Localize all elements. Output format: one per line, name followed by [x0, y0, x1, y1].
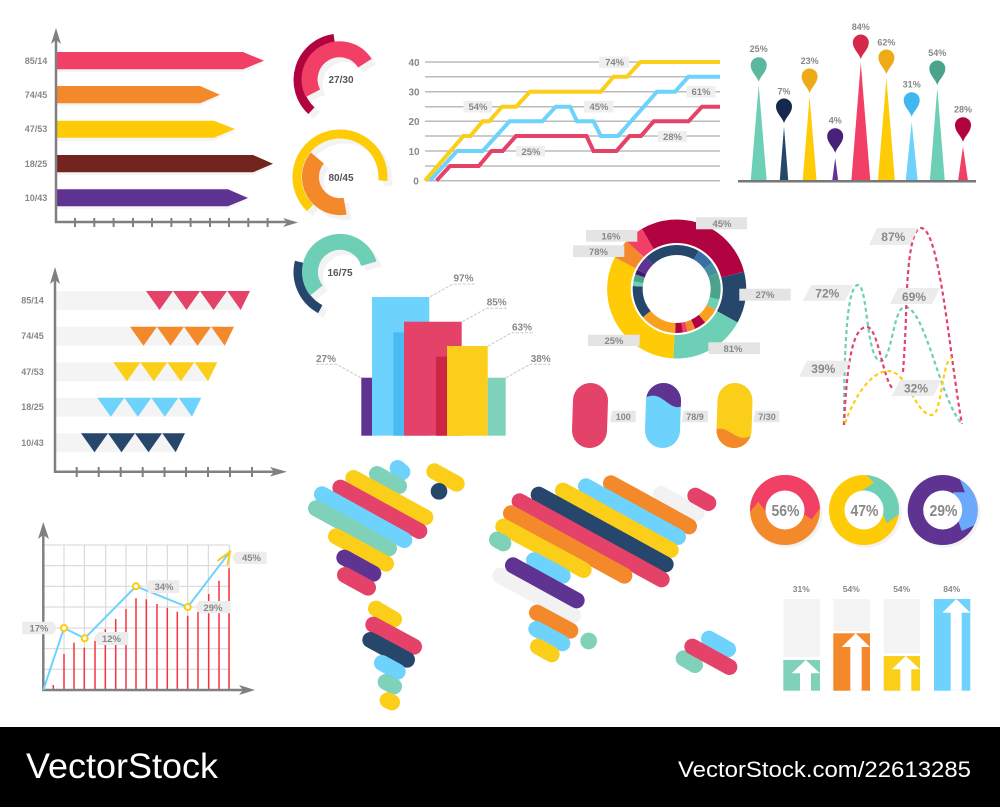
pin 84% [851, 22, 870, 181]
panel: radial gauge 16/75: 16/75 [327, 268, 353, 279]
panel: arrow column chart [783, 584, 970, 691]
chart tags: 17% [29, 624, 49, 634]
chart tags: 29% [203, 603, 223, 614]
pill tags: 78/9 [686, 412, 704, 422]
footer logo: VectorStock [26, 747, 219, 786]
panel: donut 29% [908, 475, 983, 548]
donut tags: 16% [601, 232, 621, 242]
donut tags: 78% [589, 247, 609, 258]
curve tags: 87% [881, 230, 906, 244]
axis numbers: 10 [408, 147, 420, 158]
axis numbers: 20 [408, 117, 420, 128]
pill 7/30 [716, 383, 752, 448]
column 31%: 31% [793, 584, 810, 594]
value tags: 54% [468, 102, 488, 113]
column red overlap [436, 357, 447, 436]
pill tags [610, 411, 779, 422]
curve tags: 32% [904, 382, 928, 396]
column percent labels: 63% [512, 322, 532, 334]
donut tags: 81% [723, 344, 743, 355]
pin 62% [877, 38, 895, 181]
curve tags: 39% [811, 362, 836, 376]
column 54% yellow [884, 584, 920, 691]
row labels: 74/45 [21, 331, 44, 341]
column percent labels: 27% [316, 354, 336, 365]
outer ring [619, 231, 734, 347]
footer bar [0, 727, 1000, 807]
triangles row 74/45 [130, 327, 234, 346]
panel: donut 47% [829, 473, 903, 548]
red bars [53, 568, 229, 690]
row labels: 10/43 [21, 438, 44, 448]
chart tags: 12% [102, 634, 122, 645]
axes [51, 28, 298, 227]
value tags: 25% [521, 147, 541, 158]
triangles row 10/43 [81, 433, 185, 452]
axes [38, 522, 255, 695]
arrow bar: 85/14 [56, 52, 264, 69]
line: yellow [425, 62, 720, 181]
panel: stepped line chart [408, 56, 720, 188]
pill 100 [572, 383, 608, 448]
triangles row 47/53 [113, 362, 217, 381]
column 31% [783, 584, 820, 691]
panel: radial gauge 80/45 [297, 134, 388, 213]
row labels [25, 56, 47, 203]
arrow tip [217, 552, 230, 565]
value tags [464, 56, 716, 158]
curve tags [799, 228, 942, 396]
column percent labels [316, 274, 551, 365]
column purple [361, 378, 372, 436]
column percent labels: 85% [487, 298, 507, 308]
line: blue [430, 77, 720, 181]
curve tags: 72% [815, 286, 840, 300]
panel: radial gauge 27/30 [298, 38, 370, 116]
panel: dashed curve chart [799, 228, 962, 425]
arrow bar: 74/45 [56, 86, 220, 103]
row labels [21, 296, 44, 448]
axis numbers [408, 58, 420, 188]
column red [404, 322, 462, 436]
North America [316, 468, 425, 588]
panel: radial gauge 27/30: 27/30 [328, 75, 354, 86]
column 54% orange: 54% [843, 584, 860, 594]
column yellow [447, 346, 488, 436]
curve tags: 69% [902, 290, 926, 304]
panel: donut 56% [748, 473, 822, 548]
value tags: 74% [605, 58, 625, 68]
triangles row 85/14 [146, 291, 250, 310]
panel: radial gauge 80/45: 80/45 [328, 173, 354, 184]
pin 31%: 31% [903, 80, 921, 90]
column blue [372, 297, 429, 436]
panel: pin spike chart [738, 22, 976, 182]
pill tags: 100 [616, 412, 631, 422]
panel: triangle row chart [21, 267, 287, 477]
axis numbers: 30 [408, 88, 420, 98]
triangles row 18/25 [97, 398, 201, 417]
pin 25%: 25% [750, 44, 768, 54]
markers [61, 583, 191, 641]
row backgrounds [56, 291, 241, 452]
arrow bar: 47/53 [56, 121, 235, 138]
panel: donut 47%: 47% [850, 503, 878, 520]
row labels: 18/25 [21, 402, 44, 412]
chart tags [22, 552, 267, 645]
value tags: 28% [663, 132, 683, 143]
donut tags: 27% [755, 290, 775, 301]
column 54% orange [833, 584, 870, 691]
arrow bar: 18/25 [56, 155, 273, 172]
Australia [684, 639, 729, 667]
row labels: 85/14 [25, 56, 47, 66]
pin 31% [903, 80, 921, 181]
pin 84%: 84% [852, 22, 870, 32]
row labels: 18/25 [25, 159, 47, 169]
panel: bar and line combo chart [22, 522, 267, 695]
panel: donut 29%: 29% [930, 503, 958, 520]
panel: double ring donut [573, 217, 791, 355]
panel: pill gauges [572, 383, 780, 448]
chart tags: 45% [242, 553, 262, 564]
column 84% [934, 584, 970, 691]
pin 28%: 28% [954, 104, 972, 114]
panel: donut 56%: 56% [772, 503, 800, 520]
line: red [436, 107, 720, 181]
donut tags: 25% [604, 336, 624, 347]
axes [50, 267, 287, 477]
pin 62%: 62% [877, 38, 895, 48]
row labels: 85/14 [21, 296, 44, 306]
Greenland [431, 471, 457, 500]
row labels: 47/53 [25, 124, 47, 134]
pin 23% [801, 56, 819, 181]
panel: overlapping column chart [315, 274, 552, 436]
South America [370, 609, 414, 702]
grid [43, 545, 229, 690]
pin 23%: 23% [801, 56, 819, 66]
inner ring [638, 250, 716, 328]
pin 4% [827, 116, 843, 181]
panel: world map of stripes [316, 468, 729, 702]
column teal [488, 378, 506, 436]
pin 54% [928, 48, 946, 181]
baseline [738, 180, 976, 182]
chart tags: 34% [154, 582, 174, 593]
dashed leaders [315, 284, 552, 378]
pin 7%: 7% [777, 86, 791, 96]
column 84%: 84% [943, 584, 961, 594]
donut tags [573, 217, 791, 355]
axis numbers: 40 [408, 58, 420, 69]
value tags: 45% [589, 102, 609, 113]
Eurasia [497, 483, 708, 579]
Africa [500, 560, 597, 654]
pill tags: 7/30 [758, 412, 776, 422]
pin 28% [954, 104, 972, 181]
value tags: 61% [691, 87, 711, 98]
arrow bar: 10/43 [56, 189, 248, 206]
panel: radial gauge 16/75 [298, 242, 374, 314]
axis numbers: 0 [413, 176, 419, 188]
pill 78/9 [645, 383, 681, 448]
trend line [43, 552, 230, 690]
row labels: 10/43 [25, 193, 47, 203]
pin 4%: 4% [829, 116, 842, 126]
pin 7% [776, 86, 792, 181]
column 54% yellow: 54% [893, 584, 911, 594]
bar shadows [56, 55, 273, 209]
column blue overlap [393, 332, 404, 436]
pin 54%: 54% [928, 48, 946, 58]
row labels: 47/53 [21, 367, 44, 377]
donut tags: 45% [712, 219, 732, 230]
panel: horizontal arrow bar chart [25, 28, 298, 227]
curves [844, 228, 962, 425]
pin 25% [750, 44, 768, 181]
column percent labels: 97% [453, 274, 474, 284]
column percent labels: 38% [531, 354, 551, 365]
row labels: 74/45 [25, 90, 47, 100]
footer image id: VectorStock.com/22613285 [678, 757, 971, 782]
